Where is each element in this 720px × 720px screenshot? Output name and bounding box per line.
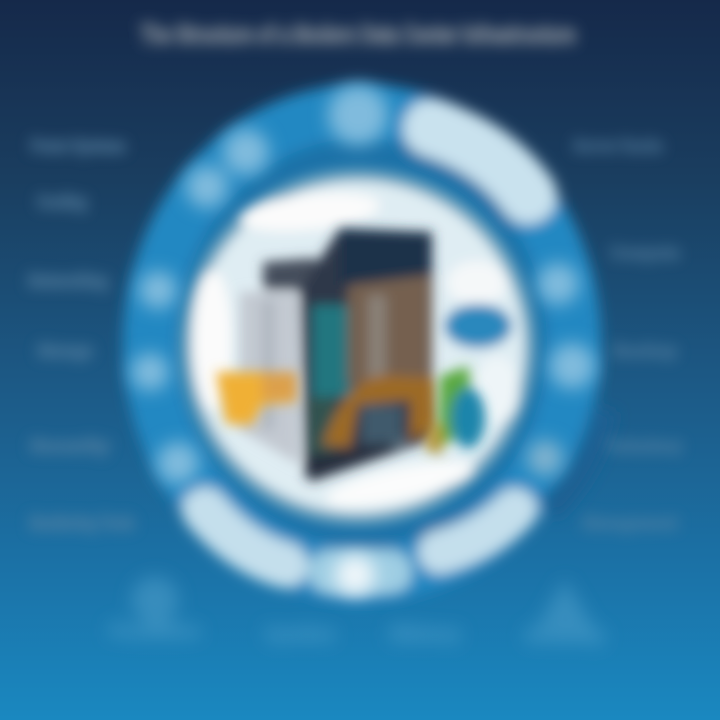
slate window (362, 405, 402, 443)
teal panel (312, 305, 352, 397)
illustration: server building (240, 228, 438, 482)
outer ring (150, 111, 604, 575)
server left face (240, 292, 300, 465)
label: right 5: Management (582, 513, 678, 533)
label: left 2: Cooling (37, 192, 87, 212)
icon: right 1 (537, 263, 579, 305)
ring icons (131, 85, 595, 595)
icon: upper left 2 (186, 166, 228, 208)
label: left 1: Power Systems (30, 136, 126, 156)
label: right 4: Redundancy (608, 436, 682, 456)
ring segment: bottom centre panel (330, 550, 390, 594)
brown panel (348, 275, 430, 385)
label: bottom 4: Scalability (525, 626, 605, 646)
icon: upper left 1 (223, 129, 269, 175)
label: right 2: Compute (610, 243, 680, 263)
server right face (300, 228, 432, 478)
left labels (28, 136, 134, 533)
bottom labels (110, 578, 605, 646)
label: bottom 1: Facilities (110, 621, 200, 641)
orange arch (322, 375, 438, 448)
icon: lower left (157, 442, 199, 484)
ring segment: bottom left panel (205, 510, 285, 565)
icon: lower right (527, 440, 563, 476)
label: bottom 1 (110, 578, 200, 641)
centre circle (180, 169, 536, 525)
illustration: yellow block (216, 372, 297, 425)
label: left 3: Networking (28, 271, 108, 291)
label: left 4: Storage (38, 341, 92, 361)
label: bottom 2: Operations (265, 624, 335, 644)
label: bottom 4 (525, 582, 605, 646)
label: left 6: Monitoring Tools (30, 513, 134, 533)
base shadow (305, 428, 432, 482)
label: right 1: Server Racks (573, 136, 663, 156)
illustration: green and blue blocks (425, 366, 485, 455)
icon: left 2 (131, 353, 169, 391)
icon: right 2 (549, 343, 595, 389)
label: right 3: Backup (612, 341, 678, 361)
icon: bottom centre (335, 555, 375, 595)
ring segment: bottom right panel (440, 510, 515, 552)
highlights (239, 187, 381, 237)
ring segment: top right panel (432, 128, 528, 195)
ring fade: lower right (548, 410, 604, 510)
badge: blue pill (444, 304, 512, 348)
icon: left 1 (139, 271, 177, 309)
label: left 5: Security (30, 436, 110, 456)
label: bottom 3: Efficiency (390, 624, 460, 644)
icon: top (328, 85, 388, 145)
right labels (573, 136, 682, 533)
